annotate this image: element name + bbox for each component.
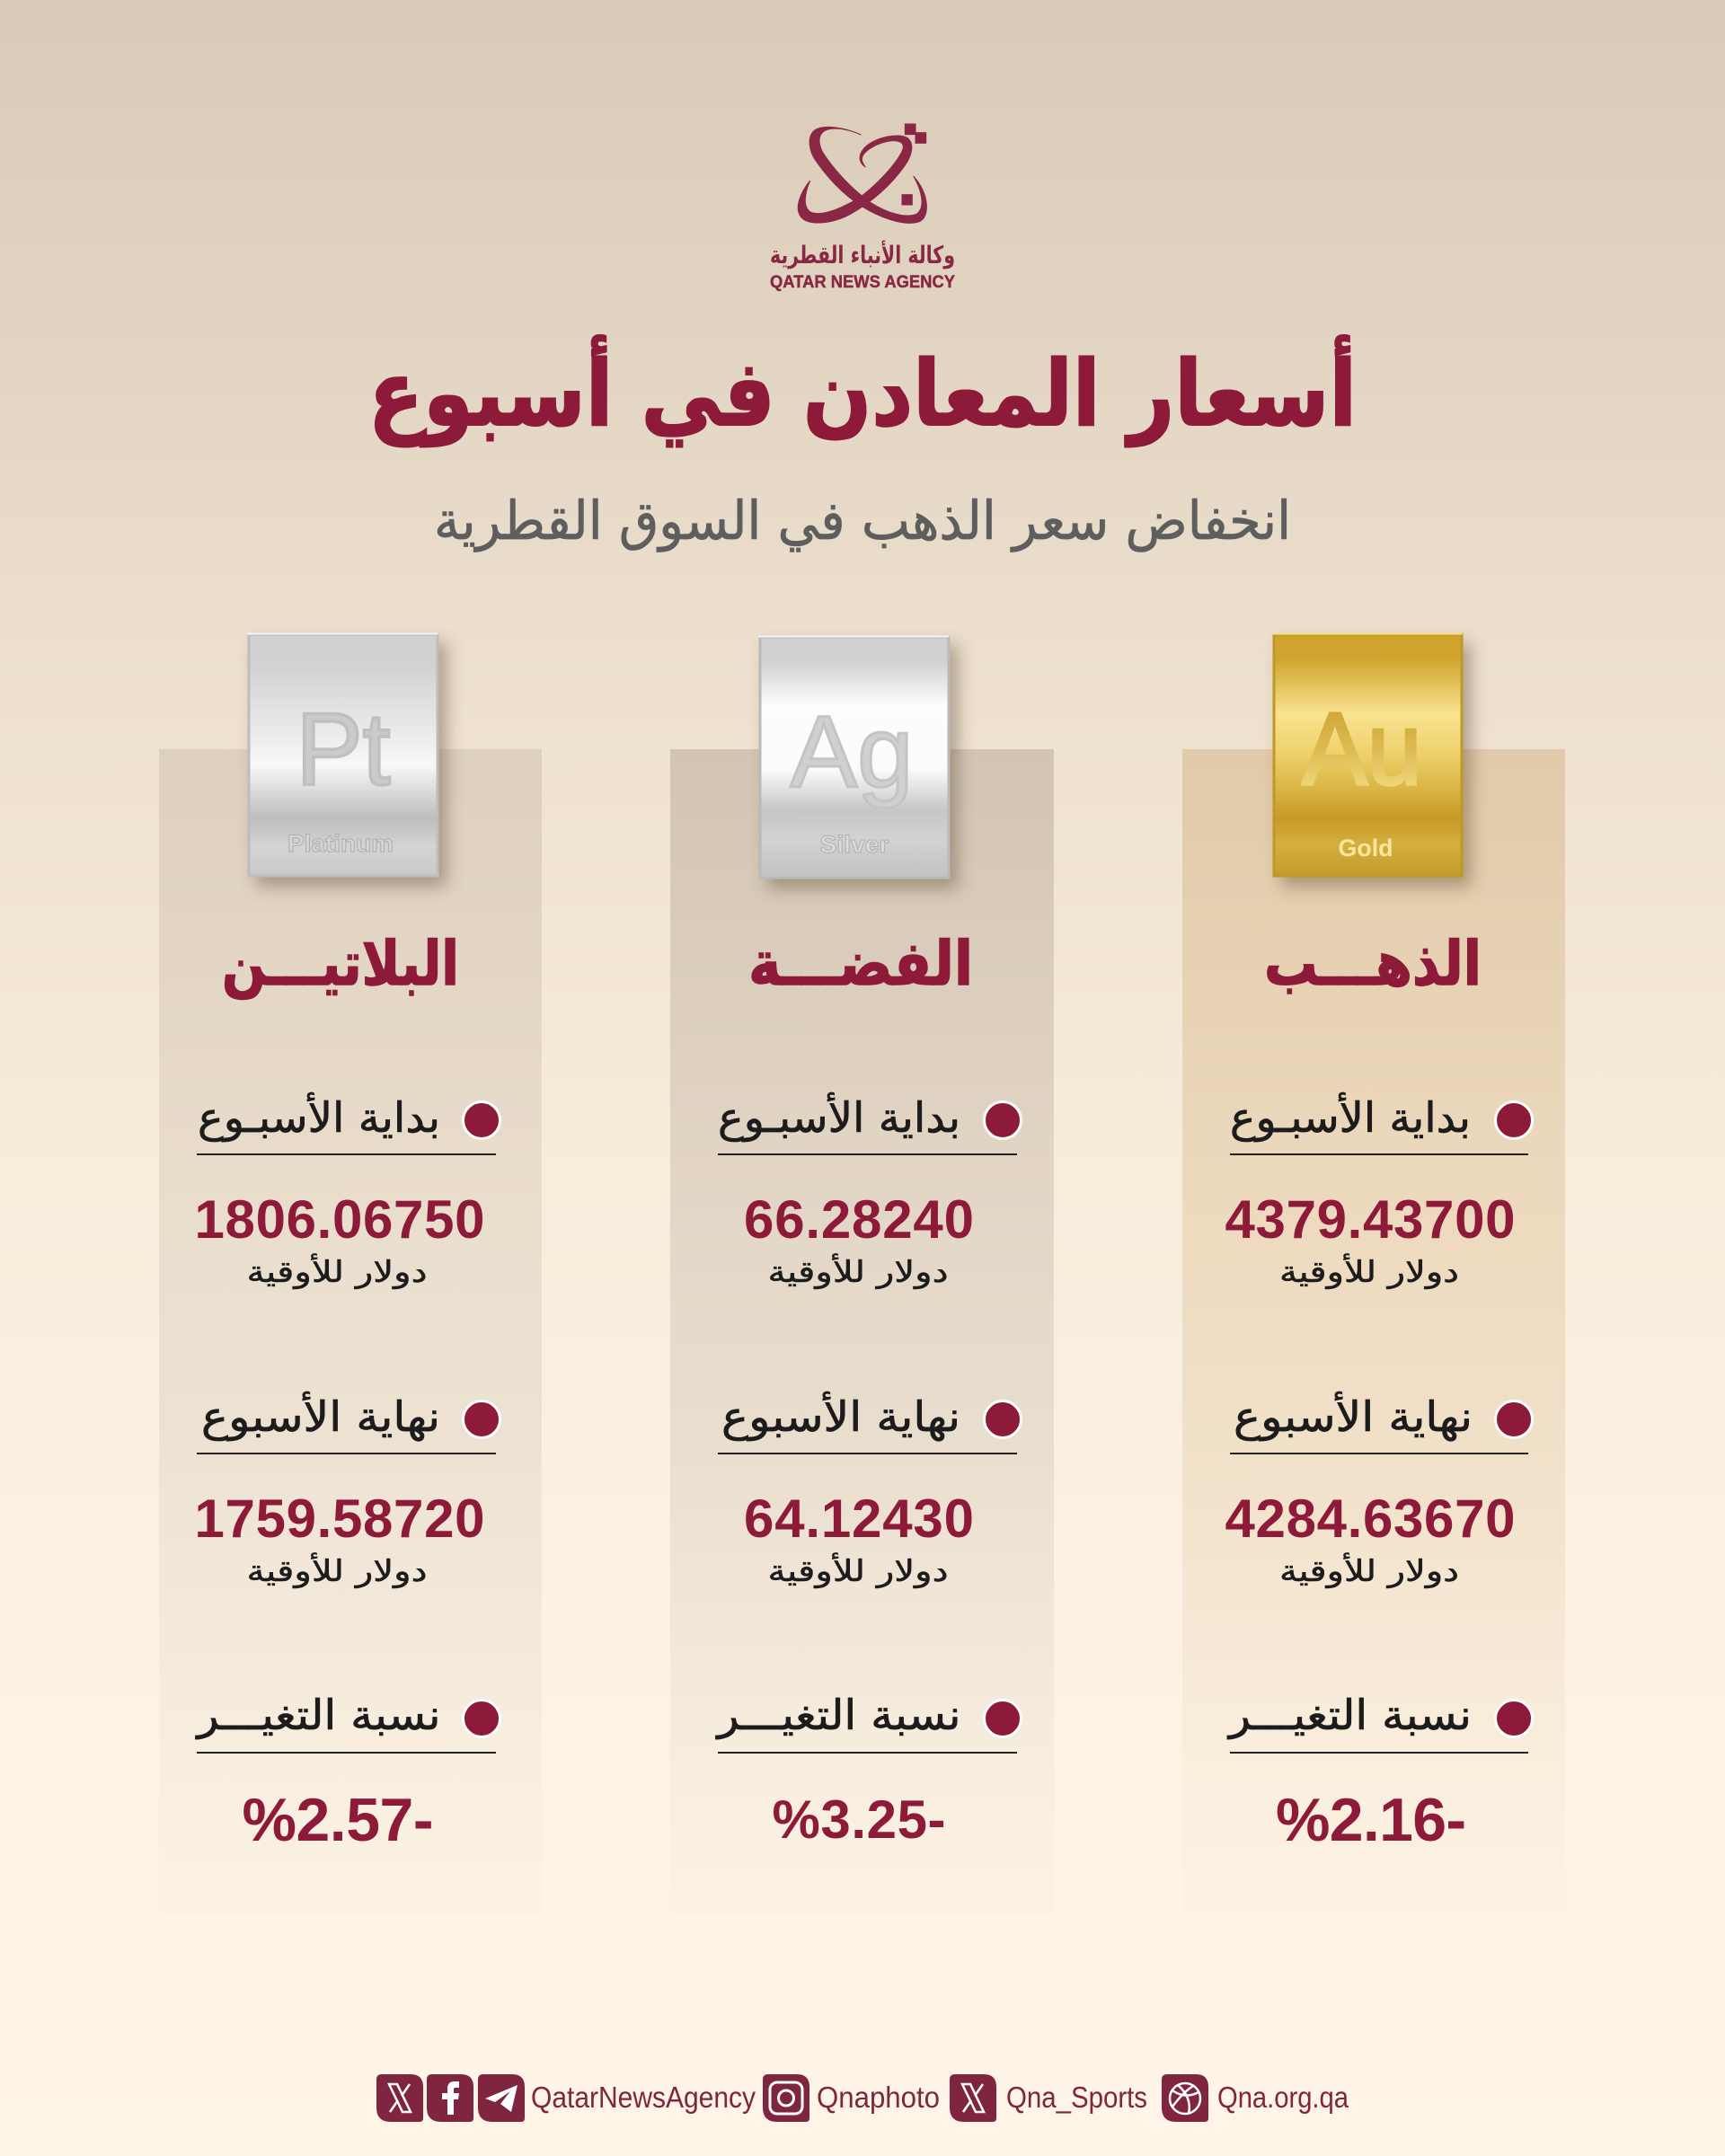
icon: silver bar: Ag xyxy=(791,695,913,808)
icon: platinum bar xyxy=(248,632,438,876)
week start row: بداية الأسبـوع xyxy=(1230,1091,1471,1143)
icon: gold bar: Au xyxy=(1303,693,1421,807)
footer: social links xyxy=(376,2074,1349,2122)
logo Arabic name: وكالة الأنباء القطرية xyxy=(770,240,955,270)
title: أسعار المعادن في أسبوع xyxy=(368,334,1357,447)
silver heading: الفضـــة xyxy=(748,929,973,1000)
panel: platinum xyxy=(159,632,542,1915)
week start row: بداية الأسبـوع xyxy=(718,1091,960,1143)
week end row: دولار للأوقية xyxy=(1279,1552,1459,1588)
logo: Qatar News Agency xyxy=(770,124,955,292)
week start row: 66.28240 xyxy=(744,1189,974,1250)
gold background xyxy=(1182,749,1565,1915)
week end row: نهاية الأسبوع xyxy=(1234,1391,1473,1442)
week end row: نهاية الأسبوع xyxy=(201,1391,440,1442)
change row: نسبة التغيـــر xyxy=(195,1691,440,1740)
week start row: 4379.43700 xyxy=(1225,1189,1515,1250)
panel: gold xyxy=(1182,632,1565,1915)
change row: %3.25- xyxy=(773,1789,945,1850)
Qna_Sports handle: Qna_Sports xyxy=(1006,2081,1147,2114)
week start row xyxy=(718,1091,1021,1289)
week end row xyxy=(1225,1391,1533,1588)
panel: silver xyxy=(670,636,1054,1915)
change row: %2.57- xyxy=(243,1786,433,1854)
icon: Telegram xyxy=(478,2074,525,2122)
subtitle: انخفاض سعر الذهب في السوق القطرية xyxy=(434,490,1291,552)
change row: %2.16- xyxy=(1276,1786,1466,1854)
icon: silver bar: Silver xyxy=(819,831,889,858)
platinum heading: البلاتيـــن xyxy=(222,929,459,1000)
week end row: نهاية الأسبوع xyxy=(721,1391,960,1442)
change row xyxy=(195,1691,500,1854)
icon: gold bar xyxy=(1272,632,1463,876)
week start row: 1806.06750 xyxy=(194,1189,485,1250)
icon: gold bar: Gold xyxy=(1339,835,1393,862)
logo English name: QATAR NEWS AGENCY xyxy=(770,273,955,292)
week start row: دولار للأوقية xyxy=(246,1253,428,1289)
logo mark xyxy=(798,124,926,223)
change row xyxy=(715,1691,1021,1850)
icon: Facebook xyxy=(427,2074,473,2122)
QatarNewsAgency handle: QatarNewsAgency xyxy=(531,2081,756,2114)
change row: نسبة التغيـــر xyxy=(1227,1691,1472,1740)
week start row xyxy=(194,1091,500,1289)
Qnaphoto handle: Qnaphoto xyxy=(817,2081,940,2114)
change row: نسبة التغيـــر xyxy=(715,1691,961,1740)
week end row xyxy=(718,1391,1021,1588)
week start row: دولار للأوقية xyxy=(767,1253,949,1289)
week end row: 64.12430 xyxy=(744,1489,974,1549)
icon: Instagram xyxy=(763,2074,809,2122)
week start row: بداية الأسبـوع xyxy=(198,1091,440,1143)
icon: website globe xyxy=(1162,2074,1208,2122)
week end row: 1759.58720 xyxy=(194,1489,485,1549)
silver background xyxy=(670,749,1054,1915)
platinum background xyxy=(159,749,542,1915)
week start row: دولار للأوقية xyxy=(1279,1253,1459,1289)
icon: silver bar xyxy=(758,636,949,878)
icon: X xyxy=(376,2074,423,2122)
week end row: 4284.63670 xyxy=(1225,1489,1515,1549)
icon: platinum bar: Pt xyxy=(296,693,390,807)
change row xyxy=(1227,1691,1533,1854)
week end row: دولار للأوقية xyxy=(767,1552,949,1588)
Qna.org.qa handle: Qna.org.qa xyxy=(1217,2081,1349,2114)
gold heading: الذهـــب xyxy=(1264,929,1482,1000)
week end row xyxy=(194,1391,500,1588)
icon: platinum bar: Platinum xyxy=(288,830,394,857)
icon: X sports xyxy=(950,2074,996,2122)
week start row xyxy=(1225,1091,1533,1289)
week end row: دولار للأوقية xyxy=(246,1552,428,1588)
